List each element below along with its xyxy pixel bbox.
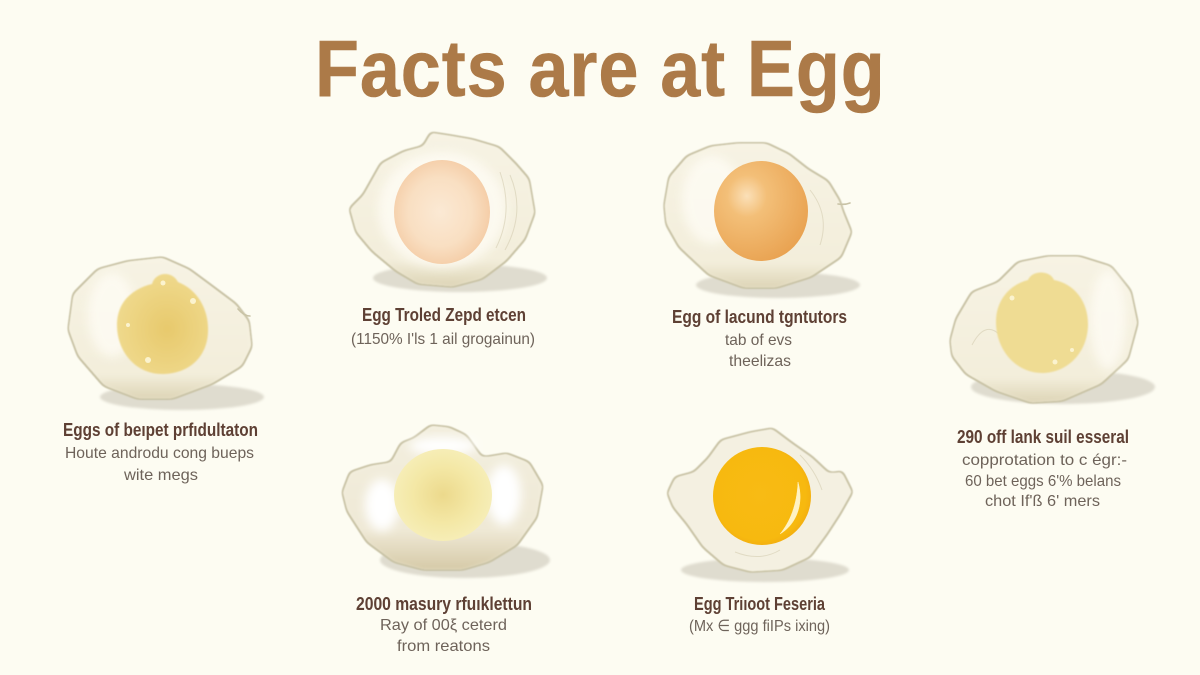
heading: Egg Troled Zepd etcen (362, 305, 526, 325)
panel: left egg fact (63, 256, 264, 484)
heading: 2000 masury rfuıklettun (356, 594, 532, 614)
heading: Egg Triıoot Feseria (694, 594, 826, 614)
description: Houte androdu cong bueps (65, 445, 254, 462)
heading: Egg of lacund tgntutors (672, 307, 847, 327)
description line 2: 60 bet eggs 6'% belans (965, 473, 1121, 490)
title: Facts are at Egg (315, 25, 885, 114)
icon: pale lemon yolk egg (341, 424, 550, 578)
description line 3: chot If'ß 6' mers (985, 493, 1100, 510)
icon: crumbly pale yolk egg (67, 256, 264, 410)
icon: pale peach yolk egg (348, 131, 547, 292)
description line 2: from reatons (397, 638, 490, 655)
description line 2: wite megs (123, 467, 198, 484)
icon: bright yellow yolk egg (666, 427, 854, 582)
panel: lower centre-right egg fact (666, 427, 854, 635)
description: copprotation to c égr:- (962, 452, 1127, 469)
description: tab of evs (725, 332, 792, 349)
icon: orange yolk egg (663, 142, 860, 298)
description: (1150% I'ls 1 ail grogainun) (351, 331, 535, 348)
panel: upper centre-right egg fact (663, 142, 860, 370)
heading: Eggs of beıpet prfıdultaton (63, 420, 258, 440)
panel: right egg fact (949, 255, 1155, 510)
description line 2: theelizas (729, 353, 791, 370)
description: (Mx ∈ ggg fiIPs ixing) (689, 618, 830, 635)
heading: 290 off lank suil esseral (957, 427, 1129, 447)
panel: lower centre-left egg fact (341, 424, 550, 655)
description: Ray of 00ξ ceterd (380, 617, 507, 634)
icon: pale golden yolk egg (949, 255, 1155, 404)
panel: upper centre-left egg fact (348, 131, 547, 348)
